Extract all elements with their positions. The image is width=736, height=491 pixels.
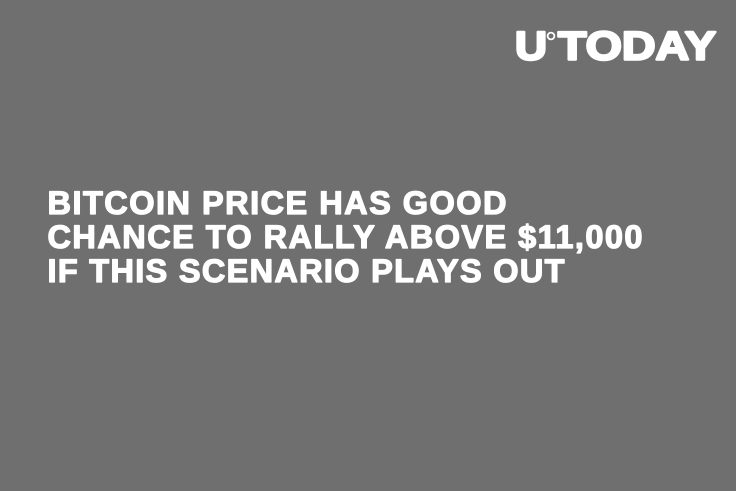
title: CHANCE TO RALLY ABOVE $11,000 (48, 219, 642, 255)
logo: U.Today: U (515, 24, 547, 68)
title (48, 185, 642, 289)
title: IF THIS SCENARIO PLAYS OUT (48, 253, 565, 289)
title: BITCOIN PRICE HAS GOOD (48, 185, 506, 221)
logo: U.Today: TODAY (558, 24, 716, 68)
logo: U.Today (515, 24, 716, 68)
